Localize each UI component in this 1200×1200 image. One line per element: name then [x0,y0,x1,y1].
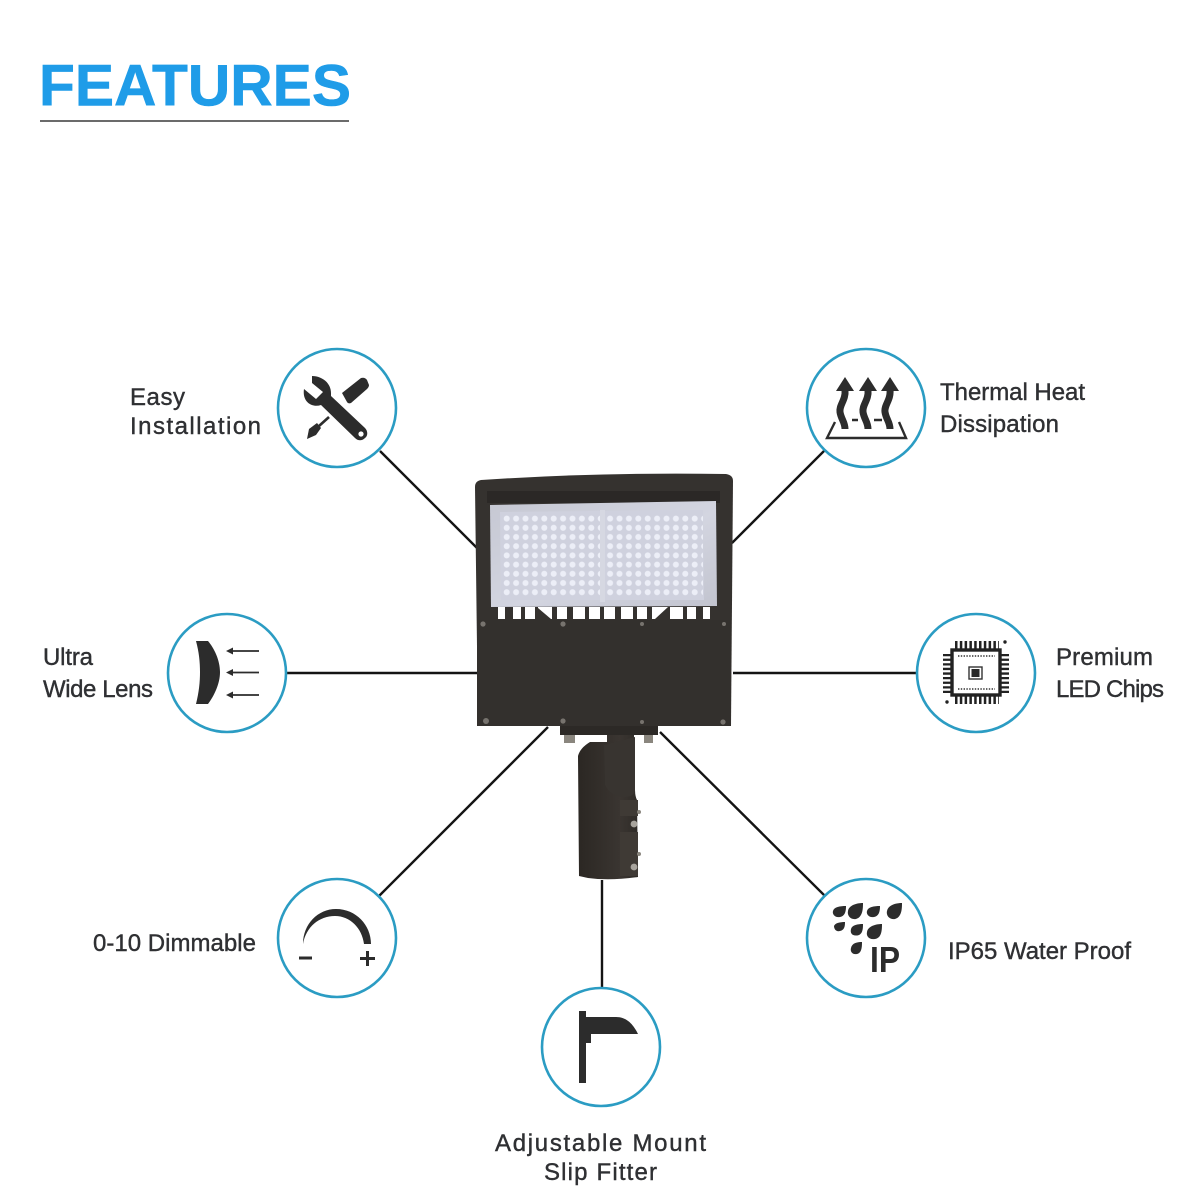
label: Ultra [43,644,94,671]
icon: pole mount [579,1011,638,1083]
label [1056,644,1164,703]
icon: chip [945,640,1007,704]
icon circle [917,614,1035,732]
connector lines [287,449,917,988]
bolts [560,726,658,735]
label: IP65 Water Proof [948,938,1131,965]
feature: premium LED chips [917,614,1164,732]
label [130,384,261,440]
feature: ultra wide lens [43,614,286,732]
icon: dimmer arc [299,909,375,966]
housing [475,474,733,726]
housing recess [487,491,720,503]
icon: water drops and IP: IP [870,939,900,980]
label: Dissipation [940,411,1059,438]
label: Easy [130,384,185,411]
icon circle [807,349,925,467]
title: FEATURES [39,54,351,118]
feature: easy installation [130,349,396,467]
label: LED Chips [1056,676,1164,703]
ventilation slots [498,607,710,619]
feature: thermal heat dissipation [807,349,1085,467]
label: Thermal Heat [940,379,1085,406]
icon: heat arrows [827,377,906,438]
label: Adjustable Mount [495,1130,706,1157]
feature: IP65 water proof [807,879,1131,997]
icon circle [168,614,286,732]
label: Wide Lens [43,676,153,703]
icon circle [278,879,396,997]
label [43,644,153,703]
feature: 0-10 dimmable [93,879,396,997]
icon circle [542,988,660,1106]
icon: water drops and IP [833,903,902,980]
label: 0-10 Dimmable [93,930,256,957]
icon circle [278,349,396,467]
label: Premium [1056,644,1153,671]
label: Installation [130,413,261,440]
slip fitter [578,735,638,879]
label: Slip Fitter [544,1159,657,1186]
product: LED shoebox area light [475,474,733,879]
label [495,1130,706,1186]
icon: wrench and screwdriver [304,376,369,440]
lower plate [477,620,731,726]
lens module [490,501,717,607]
icon circle [807,879,925,997]
feature: adjustable mount slip fitter [495,988,706,1186]
label [940,379,1085,438]
icon: lens with arrows [196,641,259,704]
screws [480,621,726,725]
